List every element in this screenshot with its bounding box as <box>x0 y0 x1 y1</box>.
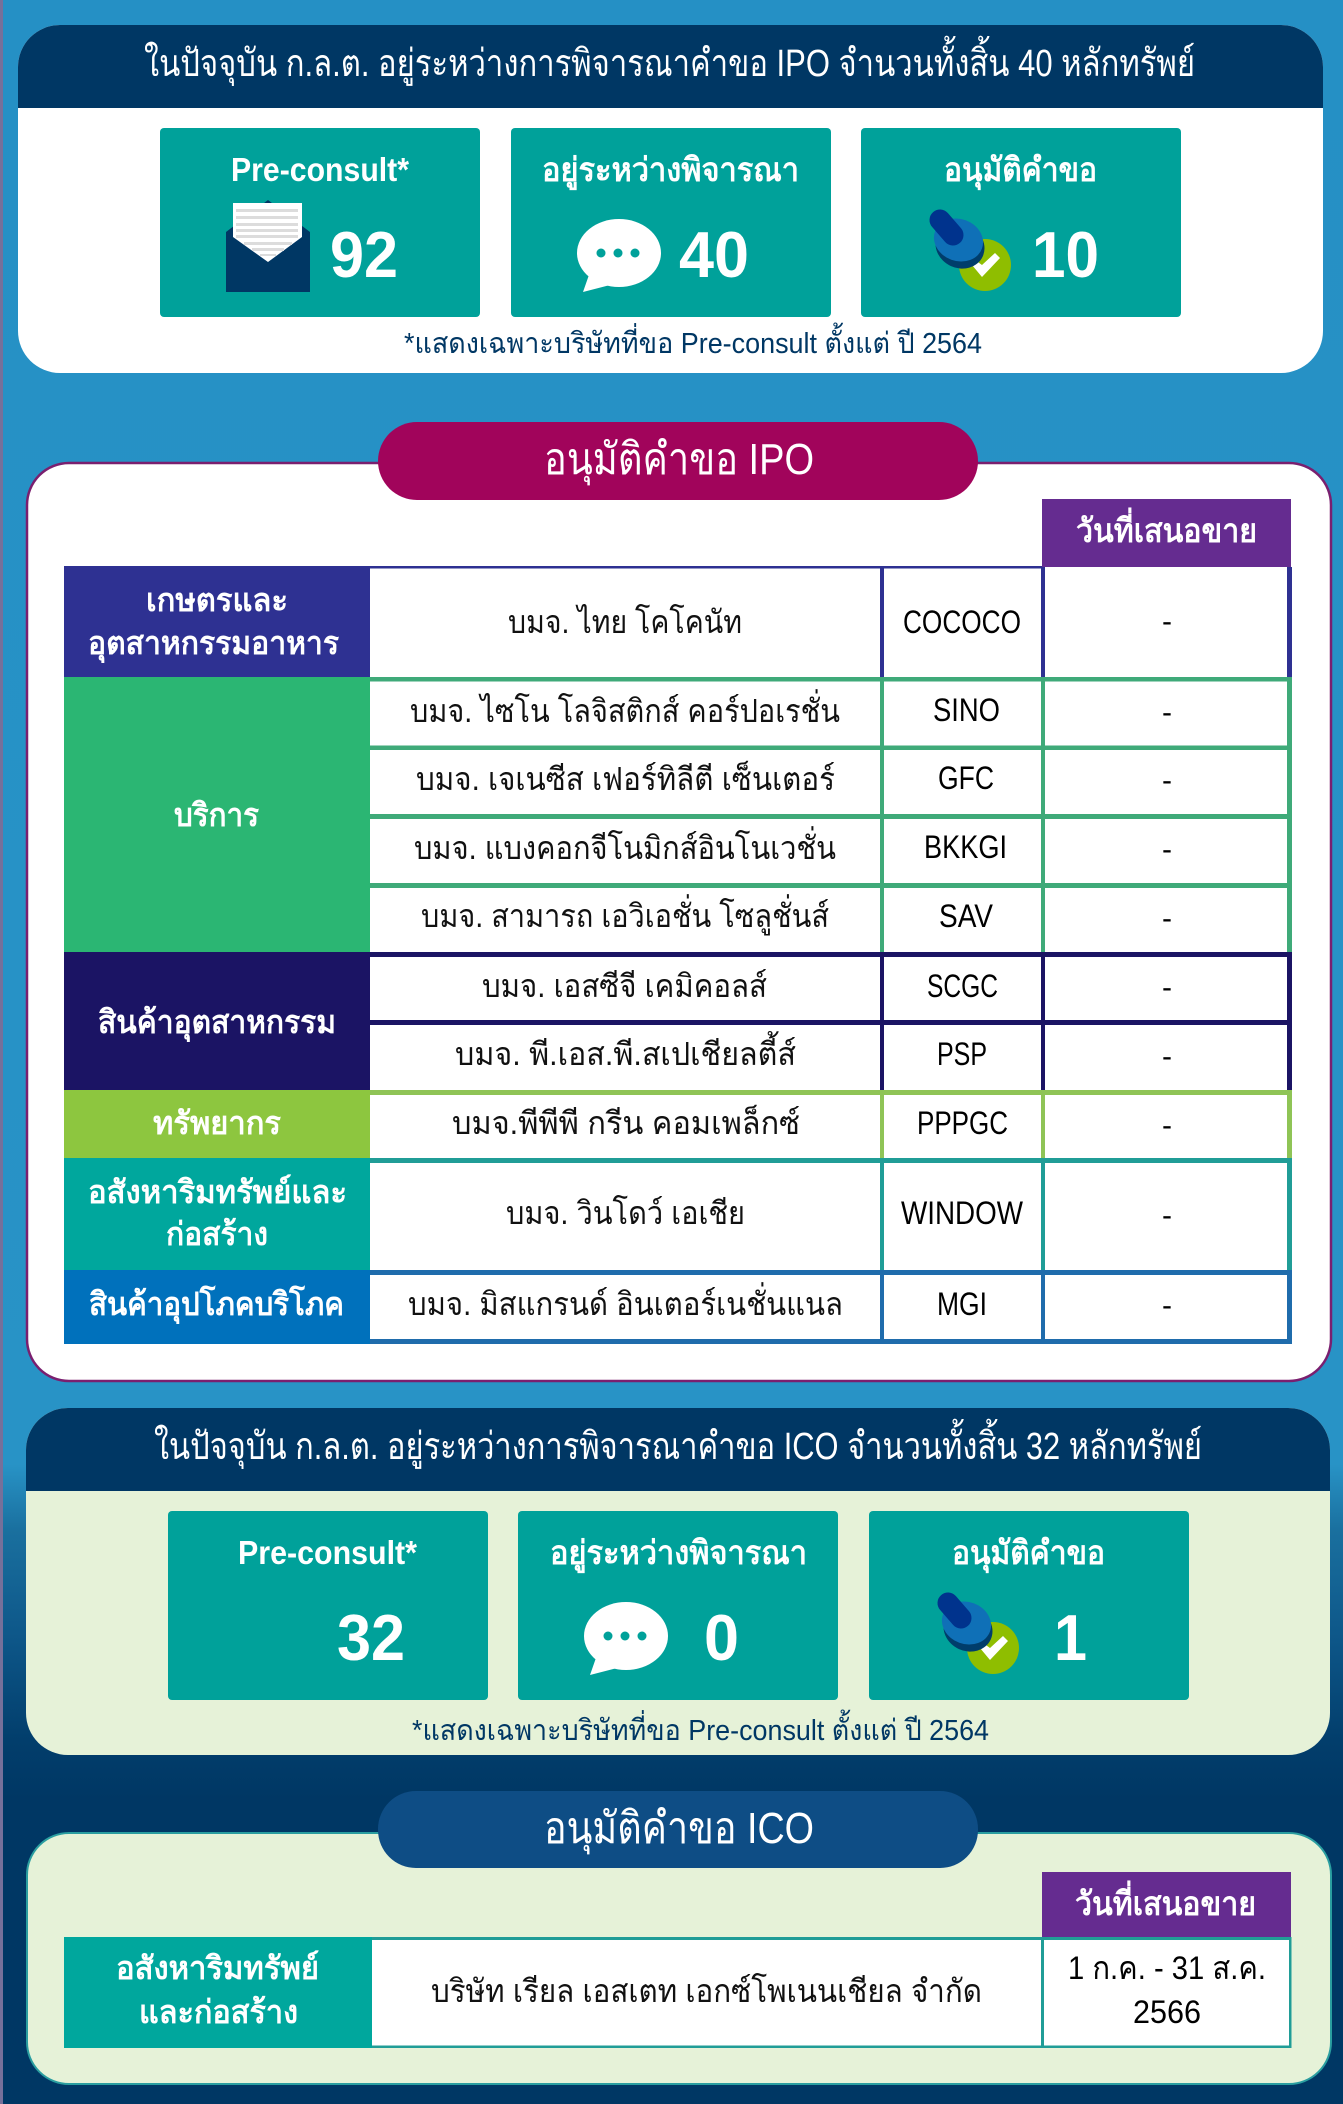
row group: resources: - <box>1162 1109 1172 1142</box>
card: approved 1 <box>869 1511 1189 1700</box>
icon: speech bubble <box>584 1602 668 1675</box>
card: Pre-consult 32 <box>168 1511 488 1700</box>
card: under review 0 <box>518 1511 838 1700</box>
row group: services: - <box>1162 696 1172 729</box>
row group: resources: PPPGC <box>917 1105 1008 1141</box>
row group: consumer products: - <box>1162 1289 1172 1322</box>
row: property and construction: 2566 <box>1133 1994 1201 2030</box>
row group: agriculture <box>64 566 1292 677</box>
row group: services: SINO <box>933 692 1000 728</box>
card: approved 10: 10 <box>1032 218 1099 291</box>
row group: services: บมจ. ไซโน โลจิสติกส์ คอร์ปอเรชั่น <box>410 689 840 729</box>
row group: services: BKKGI <box>924 829 1007 865</box>
card: approved 10: อนุมัติคำขอ <box>944 151 1097 191</box>
footnote: *แสดงเฉพาะบริษัทที่ขอ Pre-consult ตั้งแต่ ปี 2564 <box>412 1709 989 1747</box>
row group: property and construction: - <box>1162 1199 1172 1232</box>
icon: speech bubble <box>577 219 661 292</box>
pill heading: IPO approved: อนุมัติคำขอ IPO <box>544 435 814 486</box>
row group: industrial: - <box>1162 971 1172 1004</box>
panel: ICO approved table <box>27 1791 1331 2084</box>
row group: industrial: สินค้าอุตสาหกรรม <box>98 1004 336 1043</box>
icon: approval stamp <box>936 1595 1019 1674</box>
row: property and construction: 1 ก.ค. - 31 ส.ค. <box>1068 1950 1266 1986</box>
card: Pre-consult 92: 92 <box>330 218 398 291</box>
row: property and construction: และก่อสร้าง <box>139 1994 298 2030</box>
card: Pre-consult 92 <box>160 128 480 317</box>
icon: approval stamp <box>928 212 1011 291</box>
row group: resources <box>64 1090 1292 1158</box>
table header: offer date: วันที่เสนอขาย <box>1075 1880 1256 1922</box>
row group: services: SAV <box>939 898 994 934</box>
row group: services: - <box>1162 902 1172 935</box>
panel: ICO summary <box>26 1408 1330 1755</box>
row group: consumer products: สินค้าอุปโภคบริโภค <box>89 1285 344 1325</box>
row group: consumer products <box>64 1270 1292 1344</box>
card: under review 40: อยู่ระหว่างพิจารณา <box>542 151 799 191</box>
pill heading: ICO approved: อนุมัติคำขอ ICO <box>544 1804 814 1855</box>
card: under review 0: อยู่ระหว่างพิจารณา <box>550 1534 807 1574</box>
row group: property and construction: ก่อสร้าง <box>166 1216 268 1252</box>
row group: industrial: - <box>1162 1040 1172 1073</box>
row group: services: GFC <box>938 760 994 796</box>
heading: IPO summary <box>18 25 1323 108</box>
row group: services: บริการ <box>174 797 259 833</box>
row group: industrial: SCGC <box>927 968 998 1004</box>
card: under review 0: 0 <box>704 1601 739 1674</box>
row group: agriculture: COCOCO <box>903 604 1021 640</box>
row group: services: - <box>1162 764 1172 797</box>
row group: agriculture: อุตสาหกรรมอาหาร <box>88 625 339 664</box>
card: Pre-consult 32: Pre-consult* <box>238 1534 417 1571</box>
row group: agriculture: - <box>1162 605 1172 638</box>
card: approved 1: 1 <box>1054 1601 1087 1674</box>
row group: industrial: PSP <box>937 1036 987 1072</box>
row group: property and construction: บมจ. วินโดว์ เอเชีย <box>506 1195 745 1231</box>
table header: offer date <box>1042 1872 1291 1937</box>
row group: consumer products: MGI <box>937 1286 987 1322</box>
row group: industrial: บมจ. เอสซีจี เคมิคอลส์ <box>482 968 767 1004</box>
pill heading: IPO approved <box>378 422 978 500</box>
icon: envelope <box>226 200 310 292</box>
row group: resources: ทรัพยากร <box>153 1105 281 1141</box>
card: Pre-consult 32: 32 <box>337 1601 405 1674</box>
table header: offer date <box>1042 499 1291 567</box>
card: under review 40: 40 <box>679 218 749 291</box>
row group: resources: บมจ.พีพีพี กรีน คอมเพล็กซ์ <box>452 1104 800 1141</box>
card: approved 10 <box>861 128 1181 317</box>
card: Pre-consult 92: Pre-consult* <box>231 151 409 188</box>
row group: agriculture: เกษตรและ <box>146 582 288 618</box>
row group: industrial: บมจ. พี.เอส.พี.สเปเชียลตี้ส์ <box>455 1031 796 1072</box>
row: property and construction: อสังหาริมทรัพย์ <box>116 1950 319 1986</box>
row group: services: - <box>1162 833 1172 866</box>
row group: property and construction: อสังหาริมทรัพย์และ <box>88 1174 347 1210</box>
table header: offer date: วันที่เสนอขาย <box>1076 507 1257 549</box>
row group: property and construction: WINDOW <box>901 1195 1024 1231</box>
row group: property and construction <box>64 1158 1292 1270</box>
card: under review 40 <box>511 128 831 317</box>
row group: services: บมจ. แบงคอกจีโนมิกส์อินโนเวชั่น <box>414 826 836 866</box>
heading: ICO summary <box>26 1408 1330 1491</box>
row group: industrial <box>64 952 1292 1090</box>
row group: consumer products: บมจ. มิสแกรนด์ อินเตอร์เนชั่นแนล <box>408 1282 843 1322</box>
panel: IPO approved table <box>27 422 1331 1381</box>
footnote: *แสดงเฉพาะบริษัทที่ขอ Pre-consult ตั้งแต่ ปี 2564 <box>404 322 982 360</box>
row group: agriculture: บมจ. ไทย โคโคนัท <box>508 604 742 640</box>
row: property and construction <box>64 1937 1292 2048</box>
row group: services <box>64 677 1292 952</box>
pill heading: ICO approved <box>378 1791 978 1868</box>
row: property and construction: บริษัท เรียล เอสเตท เอกซ์โพเนนเชียล จำกัด <box>431 1973 982 2009</box>
row group: services: บมจ. เจเนซีส เฟอร์ทิลีตี เซ็นเตอร์ <box>416 760 835 797</box>
card: approved 1: อนุมัติคำขอ <box>952 1534 1105 1574</box>
row group: services: บมจ. สามารถ เอวิเอชั่น โซลูชั่นส์ <box>421 894 829 936</box>
panel: IPO summary <box>18 25 1323 373</box>
